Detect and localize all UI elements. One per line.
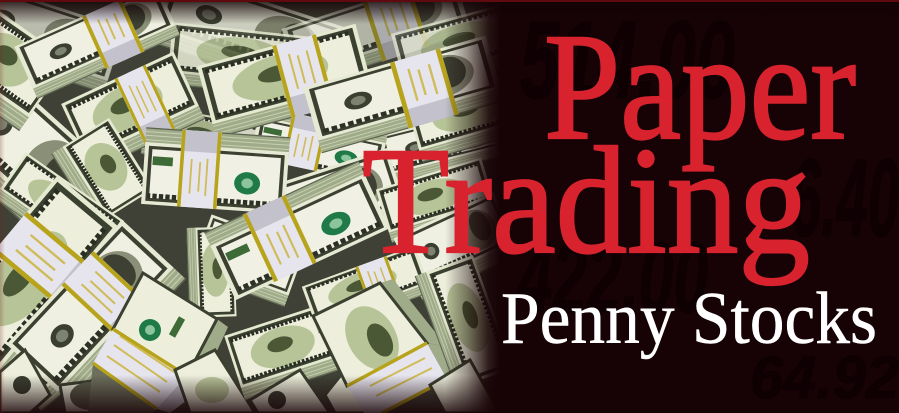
subtitle: Penny Stocks: Penny Stocks bbox=[501, 278, 877, 360]
background: faint stock ticker numbers: 514.00 bbox=[520, 0, 735, 122]
large bundle with tree and band bbox=[313, 279, 462, 413]
bundle with green seal and band bbox=[88, 273, 228, 413]
fading bill at bottom right of pile bbox=[430, 360, 500, 413]
top edge line bbox=[0, 0, 899, 2]
background: faint stock ticker numbers: 64.92 bbox=[750, 344, 899, 411]
photo: pile of banded hundred dollar bills bbox=[0, 2, 496, 413]
title: Paper Trading bbox=[362, 3, 856, 286]
bottom-edge bills bbox=[0, 350, 150, 413]
background: faint stock ticker numbers: 422.00 bbox=[517, 222, 708, 334]
title word: Paper: Paper bbox=[544, 3, 856, 172]
lower bills bbox=[175, 302, 380, 413]
background: faint stock ticker numbers bbox=[517, 0, 899, 411]
title word: Trading: Trading bbox=[362, 117, 810, 286]
